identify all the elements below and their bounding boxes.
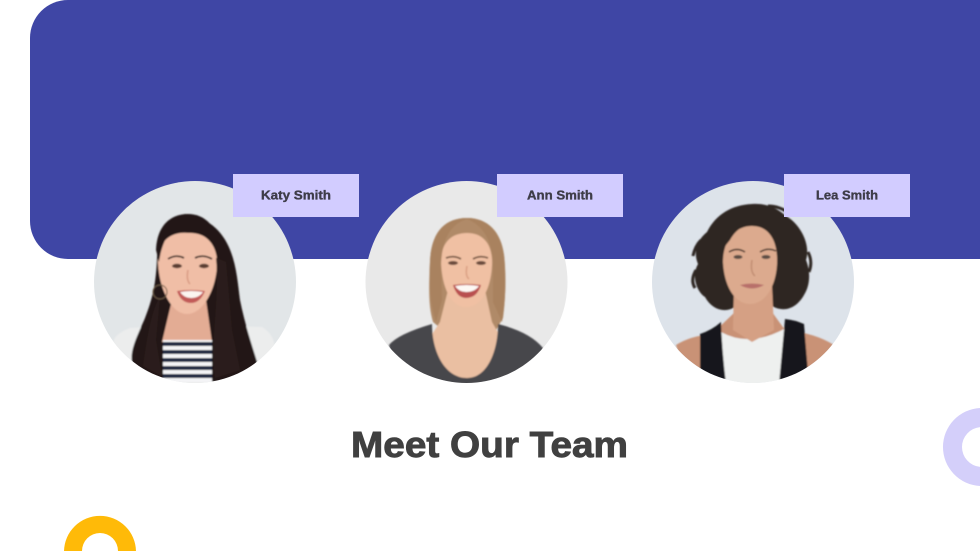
- neck: [162, 300, 212, 342]
- face: [440, 232, 493, 293]
- nose: [466, 266, 469, 279]
- curly hair: [695, 204, 809, 310]
- nose: [751, 260, 755, 276]
- dark top: [389, 324, 543, 390]
- portrait: Katy Smith: [94, 181, 296, 385]
- hair front: [155, 213, 210, 262]
- nose: [187, 270, 190, 284]
- striped shirt: [163, 340, 212, 382]
- name label: Ann Smith: [497, 174, 623, 217]
- blue header panel: [30, 0, 980, 259]
- brows and eyes: [446, 257, 488, 259]
- brows and eyes: [729, 249, 776, 252]
- decorative ring: lavender: [943, 408, 980, 486]
- neck and chest: [432, 292, 499, 379]
- face: [158, 233, 217, 314]
- blazer: [113, 326, 275, 385]
- smile: [177, 290, 205, 303]
- hair back: [132, 214, 258, 382]
- hair fringe: [725, 228, 738, 246]
- name label: Ann Smith: Ann Smith: [527, 188, 593, 202]
- vest left: [700, 322, 726, 384]
- curls: [693, 206, 811, 288]
- smile: [453, 284, 481, 298]
- neck: [733, 285, 774, 342]
- portrait: Lea Smith: [652, 181, 855, 390]
- lips: [740, 284, 764, 288]
- face: [723, 226, 777, 304]
- white top: [721, 328, 790, 385]
- vest right: [779, 319, 808, 384]
- shoulders: [675, 313, 833, 368]
- earring: [153, 285, 167, 299]
- hair back: [429, 218, 505, 332]
- portrait: Ann Smith: [365, 181, 568, 390]
- eyes and brows: [168, 256, 212, 259]
- decorative ring: yellow: [64, 516, 136, 551]
- hair strands: [430, 218, 505, 322]
- name label: Katy Smith: Katy Smith: [261, 188, 331, 202]
- name label: Lea Smith: Lea Smith: [816, 188, 878, 202]
- name label: Katy Smith: [233, 174, 359, 217]
- title: Meet Our Team: [351, 424, 628, 465]
- name label: Lea Smith: [784, 174, 910, 217]
